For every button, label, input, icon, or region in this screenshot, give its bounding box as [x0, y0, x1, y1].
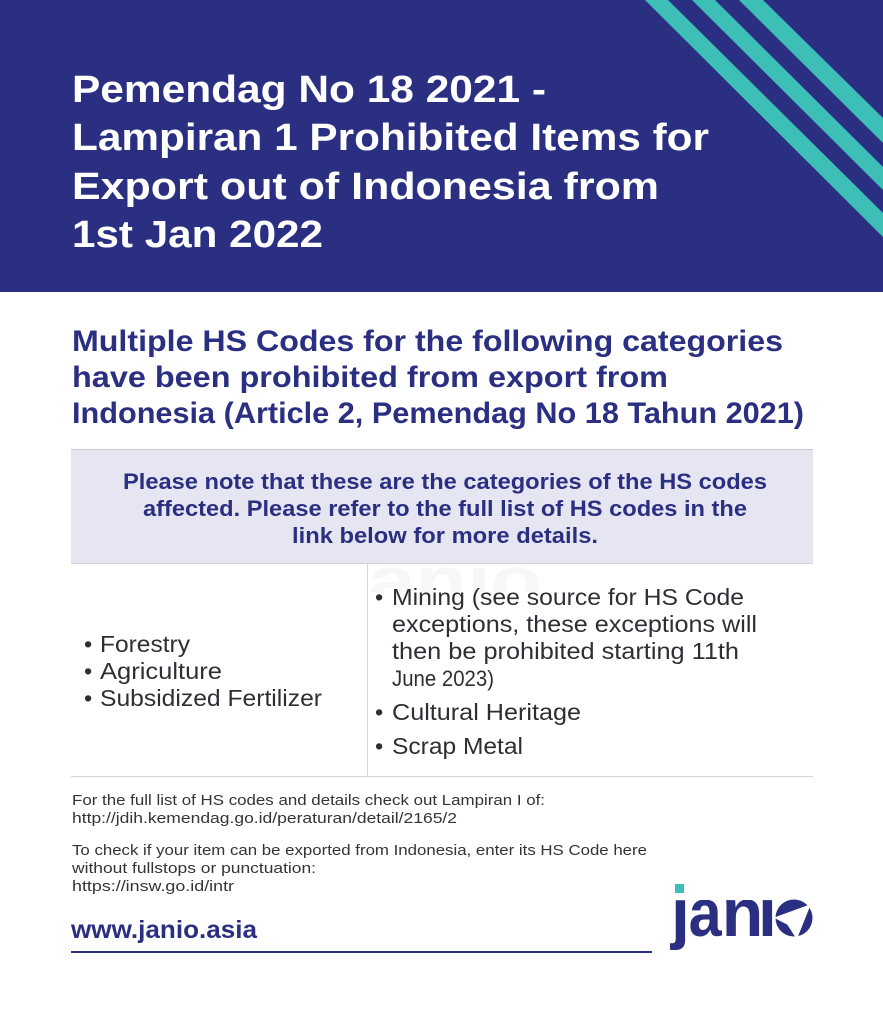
right category list: exceptions, these exceptions will [392, 611, 757, 637]
right category list: Scrap Metal [392, 733, 523, 759]
janio logo: j [669, 875, 690, 951]
note text: Please note that these are the categories of the HS codes [123, 469, 767, 494]
janio logo: i [758, 875, 777, 951]
left category list: • [84, 685, 92, 711]
note text: affected. Please refer to the full list of HS codes in the [143, 496, 747, 521]
right category list: • [375, 699, 383, 725]
check instructions: To check if your item can be exported from Indonesia, enter its HS Code here [72, 842, 647, 859]
check instructions [71, 842, 647, 895]
janio logo: n [722, 875, 763, 951]
janio logo [660, 870, 812, 951]
website url: www.janio.asia [70, 916, 258, 944]
title: Lampiran 1 Prohibited Items for [72, 117, 709, 159]
note text [123, 469, 767, 548]
source note [72, 792, 545, 827]
table dividers [71, 564, 813, 777]
title: Pemendag No 18 2021 - [72, 69, 546, 111]
note panel [71, 449, 813, 564]
left category list: • [84, 658, 92, 684]
left category list: Forestry [100, 631, 190, 657]
title [72, 69, 709, 256]
right category list: • [375, 584, 383, 610]
title: Export out of Indonesia from [72, 166, 659, 208]
left category list: Subsidized Fertilizer [100, 685, 322, 711]
right category list: June 2023) [392, 666, 494, 691]
subheading: have been prohibited from export from [72, 361, 668, 394]
right category list: • [375, 733, 383, 759]
header banner [0, 0, 883, 292]
right category list: Cultural Heritage [392, 699, 581, 725]
title: 1st Jan 2022 [72, 214, 323, 256]
right category list: then be prohibited starting 11th [392, 638, 739, 664]
left category list: • [84, 631, 92, 657]
watermark: janio [342, 543, 542, 617]
subheading [72, 325, 804, 430]
subheading: Indonesia (Article 2, Pemendag No 18 Tahun 2021) [72, 397, 804, 430]
left category list [84, 631, 322, 711]
source note: For the full list of HS codes and details check out Lampiran I of: [72, 792, 545, 809]
source note: http://jdih.kemendag.go.id/peraturan/detail/2165/2 [72, 810, 457, 827]
check instructions: without fullstops or punctuation: [71, 860, 316, 877]
right category list: Mining (see source for HS Code [392, 584, 744, 610]
right category list [375, 584, 757, 759]
teal diagonal stripes [645, 0, 883, 237]
note text: link below for more details. [292, 523, 598, 548]
janio logo: a [689, 875, 723, 951]
left category list: Agriculture [100, 658, 222, 684]
subheading: Multiple HS Codes for the following categories [72, 325, 783, 358]
check instructions: https://insw.go.id/intr [72, 878, 234, 895]
